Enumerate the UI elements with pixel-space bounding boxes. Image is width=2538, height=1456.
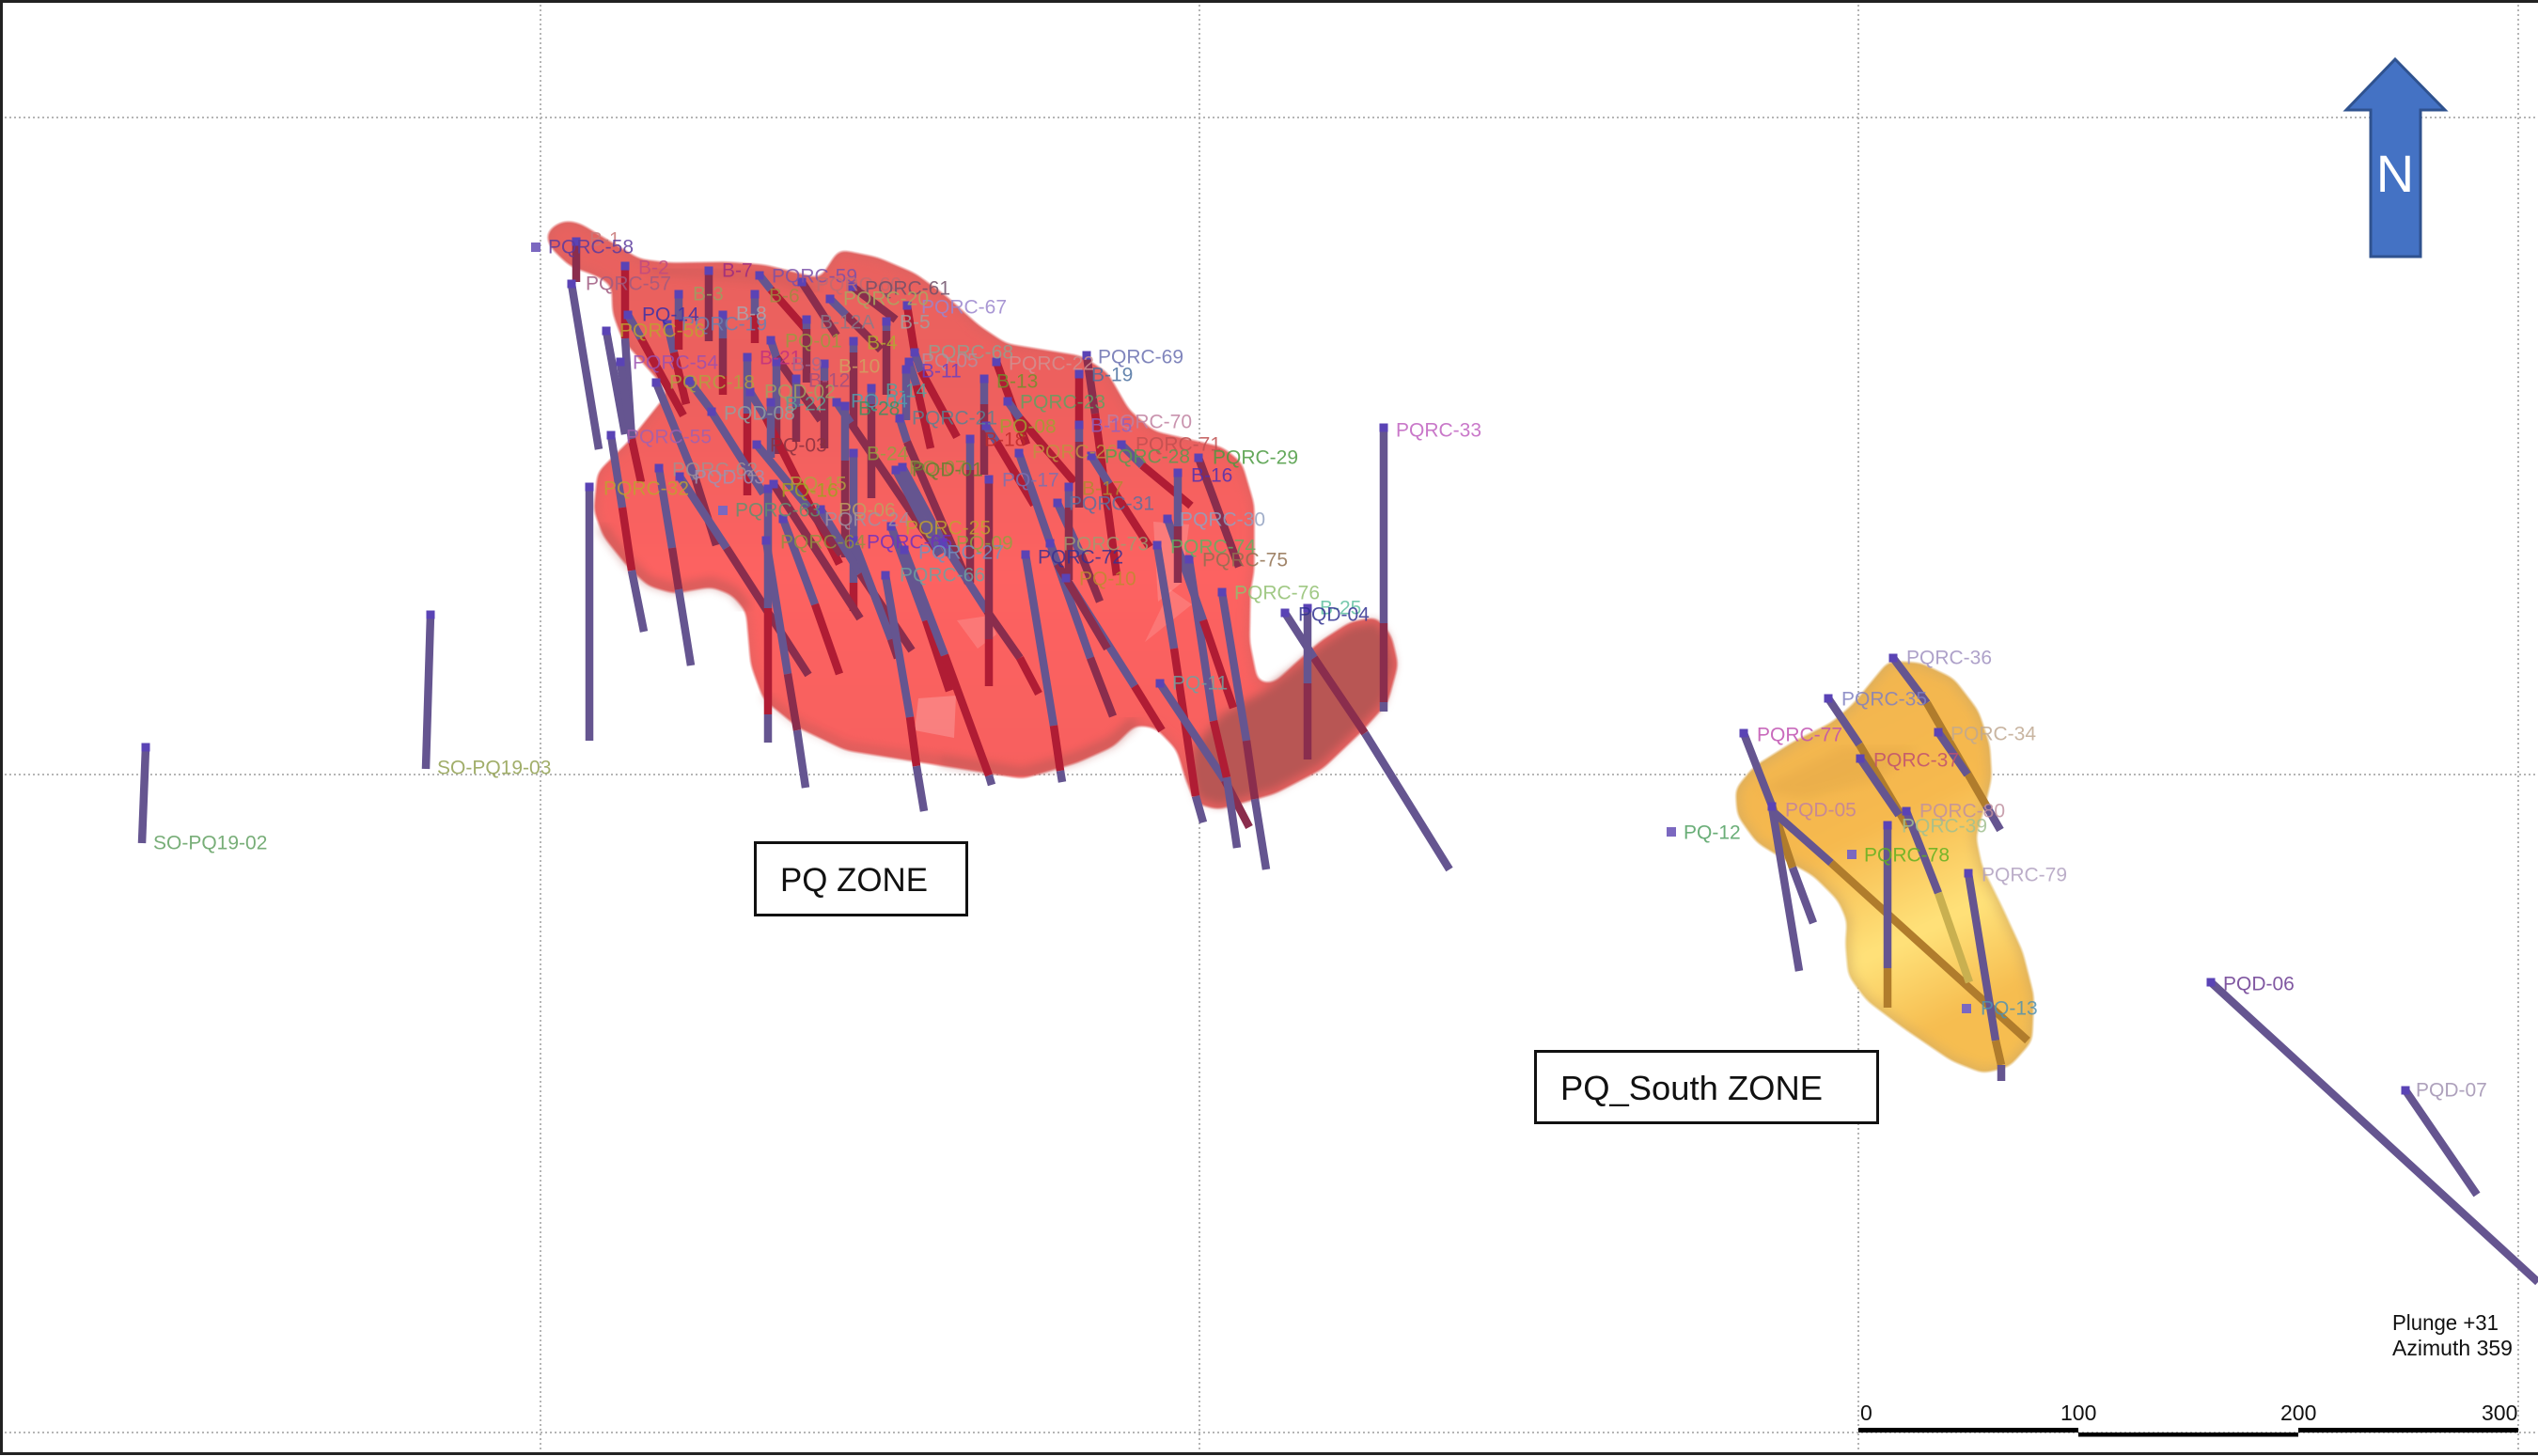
hole labels: PQRC-33 (1396, 419, 1481, 442)
hole labels: PQRC-62 (672, 459, 758, 481)
hole labels: PQRC-29 (1213, 447, 1298, 468)
hole labels: PQ-07 (909, 457, 966, 479)
hole labels: PQRC-69 (1098, 346, 1183, 368)
hole labels: PQRC-73 (1063, 534, 1149, 555)
hole labels: B-14 (885, 380, 928, 402)
hole labels: PQRC-67 (921, 297, 1007, 318)
hole labels: B-24 (867, 444, 909, 464)
hole labels: PQRC-36 (1906, 647, 1992, 669)
hole labels: PQ-04 (851, 391, 908, 412)
hole labels: PQD-03 (694, 466, 765, 489)
hole labels: PQRC-79 (1982, 865, 2067, 885)
hole labels: PQRC-68 (928, 342, 1013, 363)
hole labels: PQRC-35 (1841, 688, 1927, 711)
hole labels: PQRC-55 (626, 427, 712, 447)
icon: north arrow: N (2376, 144, 2414, 203)
hole labels: B-13 (996, 370, 1038, 393)
hole labels: B-18 (984, 429, 1026, 451)
hole labels: B-12A (820, 312, 874, 333)
hole labels: PQRC-32 (603, 478, 689, 500)
view orientation note: Plunge +31 (2392, 1310, 2499, 1335)
hole labels: PQD-02 (764, 382, 836, 402)
hole labels: B-17 (1082, 478, 1123, 500)
hole labels: PQRC-66 (900, 564, 985, 587)
hole labels: PQRC-57 (586, 273, 671, 295)
hole labels: SO-PQ19-03 (437, 758, 551, 778)
hole labels: B-22 (785, 393, 826, 415)
hole labels: PQRC-54 (633, 352, 718, 374)
hole labels: PQ-13 (1981, 998, 2038, 1019)
hole labels: PQRC-25 (905, 517, 991, 540)
hole labels: PQ-15 (790, 474, 847, 494)
hole labels: SO-PQ19-02 (153, 833, 267, 853)
hole labels: PQ-16 (781, 479, 838, 502)
hole labels: PQRC-58 (548, 237, 634, 258)
hole labels: PQRC-20 (843, 288, 929, 310)
hole labels: PQ-09 (956, 532, 1013, 555)
hole labels: PQRC-26 (1032, 442, 1118, 462)
hole labels: PQRC-19 (682, 314, 767, 335)
hole labels: PQRC-75 (1202, 549, 1288, 571)
scale bar (1858, 1401, 2518, 1436)
hole labels: PQD-04 (1298, 603, 1370, 626)
hole labels: B-6 (769, 286, 800, 306)
hole labels: PQ-17 (1002, 470, 1059, 491)
hole labels: PQRC-56 (619, 320, 705, 342)
hole labels: PQRC-77 (1757, 724, 1842, 746)
hole labels: PQRC-78 (1864, 844, 1950, 867)
hole labels: B-15 (1090, 415, 1132, 436)
hole labels: PQRC-30 (1180, 509, 1265, 530)
hole labels: PQ-11 (1172, 673, 1228, 694)
hole labels: PQRC-70 (1106, 412, 1192, 432)
hole labels: PQ-03 (770, 434, 827, 457)
hole labels: B-25 (1320, 598, 1361, 618)
hole labels: B-21 (760, 348, 801, 368)
icon: north arrow (2346, 59, 2445, 257)
scale bar: 300 (2482, 1401, 2517, 1425)
hole labels: PQD-05 (1785, 799, 1856, 822)
hole labels: B-16 (1191, 464, 1232, 487)
hole labels: PQ-10 (1079, 568, 1136, 590)
scale bar: 200 (2280, 1401, 2316, 1425)
hole labels: PQRC-21 (912, 408, 997, 429)
hole labels: B-2 (638, 258, 669, 278)
drill holes: PQ zone (572, 242, 1449, 869)
view orientation note (2392, 1310, 2513, 1360)
hole labels: PQRC-61 (865, 278, 950, 299)
hole labels: B-11 (921, 361, 962, 382)
hole labels: B-28 (858, 399, 900, 419)
drill holes: PQ South zone (1744, 658, 2028, 1081)
drill holes: outlying (142, 615, 2538, 1282)
hole labels: B-12 (808, 370, 850, 391)
callout: PQ ZONE (756, 842, 966, 916)
callout: PQ_South ZONE (1536, 1051, 1878, 1122)
hole labels: PQRC-39 (1902, 816, 1987, 837)
hole labels: PQD-01 (912, 459, 983, 481)
hole labels: PQRC-34 (1950, 724, 2036, 744)
hole labels: PQRC-63 (735, 500, 821, 521)
hole labels: PQ-12 (1684, 822, 1741, 844)
hole labels: PQD-07 (2416, 1079, 2487, 1102)
hole labels: B-1 (589, 229, 620, 250)
hole labels: PQ-08 (999, 415, 1057, 438)
hole labels: PQRC-31 (1069, 493, 1154, 515)
scale bar: 0 (1860, 1401, 1872, 1425)
view orientation note: Azimuth 359 (2392, 1336, 2513, 1360)
hole labels: PQRC-28 (1104, 446, 1190, 468)
hole labels: B-19 (1091, 365, 1133, 385)
hole labels: B-9 (791, 353, 822, 376)
hole labels: B-10 (838, 355, 880, 378)
hole labels: PQ-05 (921, 350, 979, 372)
hole labels: PQRC-27 (918, 541, 1004, 564)
collar markers without traces (531, 243, 1971, 1013)
hole labels: PQRC-24 (824, 509, 910, 530)
hole labels: PQRC-23 (1020, 391, 1105, 414)
hole labels: PQ-01 (785, 331, 842, 352)
hole labels: PQ-06 (838, 500, 896, 521)
hole labels: PQRC-64 (780, 532, 866, 553)
hole labels: B-5 (900, 312, 931, 333)
hole labels (153, 229, 2487, 1102)
hole labels: PQRC-18 (669, 372, 755, 393)
hole labels: B-3 (693, 284, 724, 305)
hole labels: PQRC-22 (1009, 353, 1094, 374)
hole labels: PQRC-65 (867, 532, 952, 553)
scale bar: 100 (2060, 1401, 2096, 1425)
hole labels: PQ-14 (642, 305, 699, 325)
hole labels: B-4 (867, 333, 898, 353)
hole labels: B-8 (736, 303, 767, 325)
hole labels: PQRC-74 (1170, 536, 1256, 558)
PQ zone solid (547, 222, 1397, 808)
hole labels: PQRC-76 (1234, 583, 1320, 603)
hole labels: PQRC-72 (1038, 547, 1123, 568)
callout: PQ_South ZONE: PQ_South ZONE (1560, 1069, 1823, 1107)
hole labels: B-7 (722, 259, 753, 282)
hole labels: PQD-06 (2223, 974, 2295, 994)
hole labels: PQRC-80 (1919, 801, 2005, 822)
hole labels: PQD-08 (724, 402, 795, 425)
PQ South zone solid (1737, 663, 2032, 1072)
hole labels: PQRC-71 (1136, 434, 1221, 455)
callout: PQ ZONE: PQ ZONE (780, 862, 928, 899)
hole labels: PQRC-59 (772, 265, 857, 288)
hole labels: PQRC-37 (1873, 750, 1959, 771)
hole labels: PQRC-60 (816, 274, 901, 295)
